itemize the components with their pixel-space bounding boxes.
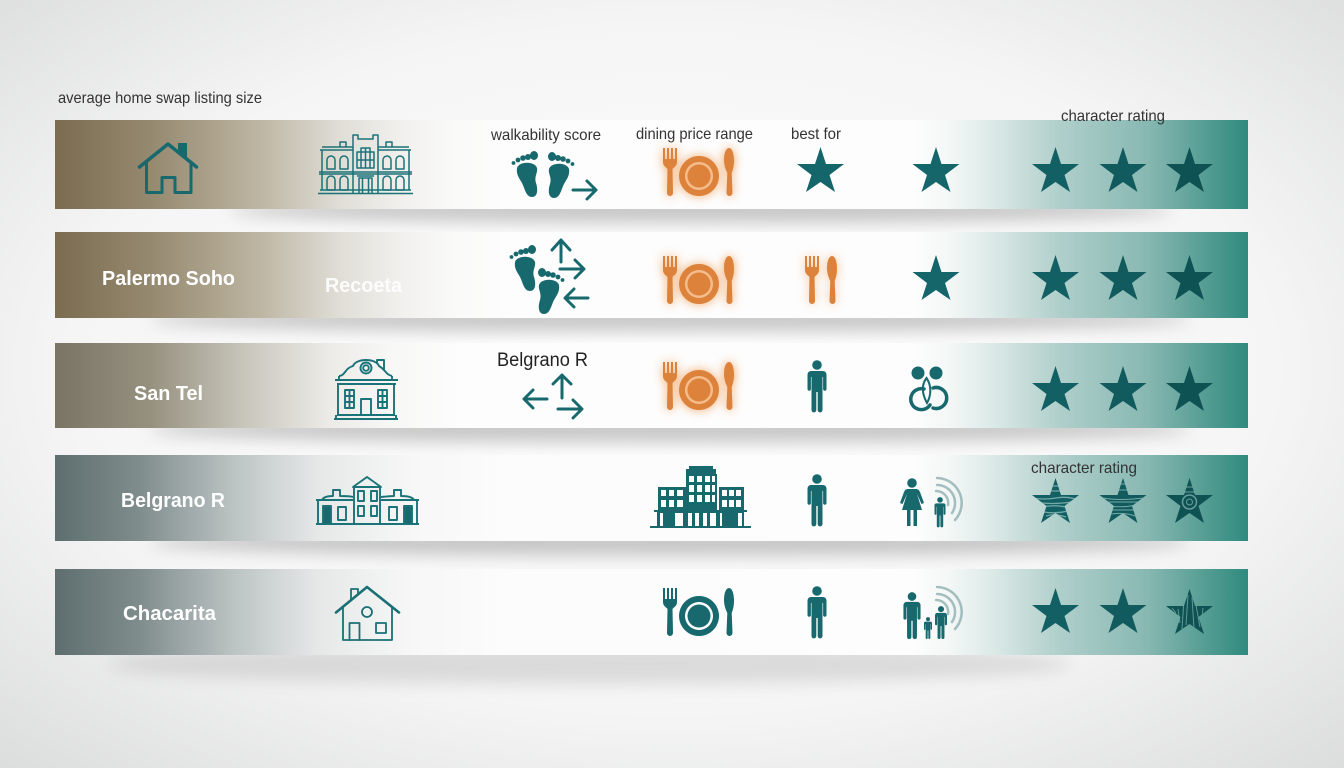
label: San Tel: San Tel	[134, 383, 203, 405]
header: dining price range: dining price range	[636, 126, 753, 143]
rating stars	[1032, 255, 1213, 300]
icon: apartment block	[650, 466, 751, 528]
rating stars	[1032, 588, 1213, 634]
label: Chacarita: Chacarita	[123, 603, 217, 625]
heading: average home swap listing size: average home swap listing size	[58, 90, 262, 107]
icon: person	[808, 474, 826, 526]
icon: mansion	[318, 135, 413, 194]
icon: house with round window	[336, 587, 399, 640]
row 2	[55, 232, 1248, 318]
rating stars	[1032, 147, 1213, 192]
row 1	[55, 108, 1248, 209]
label: Palermo Soho: Palermo Soho	[102, 268, 235, 290]
header: best for: best for	[791, 126, 842, 143]
icon: two people and linked rings	[911, 366, 947, 410]
header: walkability score: walkability score	[490, 127, 601, 144]
icon: plate, fork and knife	[663, 148, 734, 196]
icon: star	[912, 255, 960, 300]
icon: person	[808, 586, 826, 638]
icon: woman and child with signal arcs	[900, 478, 962, 527]
header: character rating: character rating	[1061, 108, 1165, 125]
icon: family with signal arcs	[903, 587, 962, 639]
icon: person	[808, 360, 826, 412]
icon: plate, fork and knife	[663, 256, 734, 304]
rating stars	[1032, 366, 1213, 411]
icon: star	[912, 147, 960, 192]
text: Belgrano R: Belgrano R	[497, 350, 588, 371]
icon: fork and knife	[805, 256, 837, 304]
icon: star	[797, 147, 844, 192]
row 5	[55, 569, 1248, 655]
label: Belgrano R: Belgrano R	[121, 490, 226, 512]
icon: footprints with three arrows	[510, 240, 588, 314]
header: character rating: character rating	[1031, 460, 1137, 477]
icon: footprints with arrow	[512, 151, 596, 199]
icon: plate, fork and knife	[663, 588, 734, 636]
row 3	[55, 343, 1248, 428]
icon: house	[140, 143, 196, 192]
label: Recoeta: Recoeta	[325, 275, 403, 297]
row 4	[55, 455, 1248, 541]
textured rating stars	[1032, 478, 1213, 523]
icon: low-rise villa	[316, 477, 419, 524]
icon: townhouse with clock	[334, 360, 398, 419]
icon: three arrows	[524, 375, 582, 418]
icon: plate, fork and knife	[663, 362, 734, 410]
